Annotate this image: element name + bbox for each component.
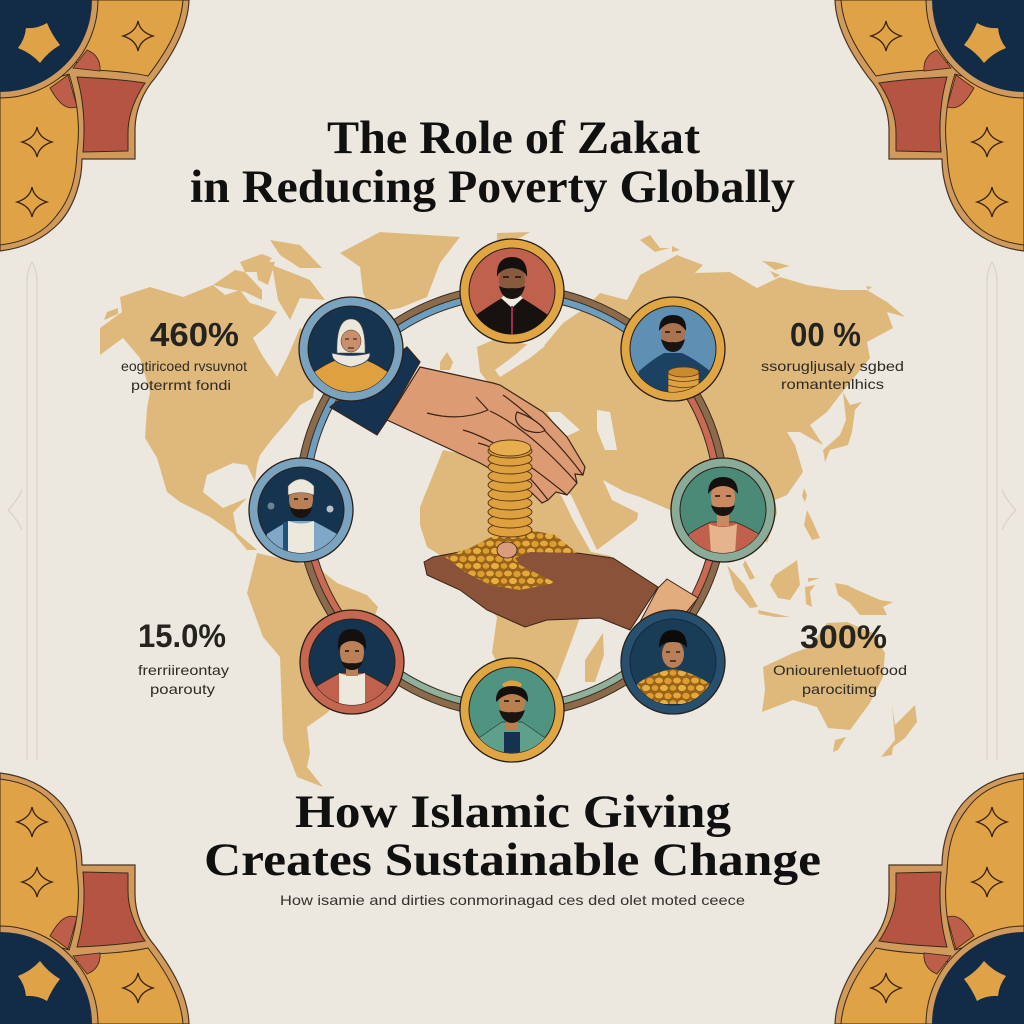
Sumatra and Java xyxy=(727,560,790,617)
stat: bottom right: 300% xyxy=(800,619,887,655)
Madagascar xyxy=(585,633,604,682)
stat: top left xyxy=(121,316,247,393)
portrait: bottom-right man with coins xyxy=(621,610,725,714)
subtitle heading: Creates Sustainable Change xyxy=(204,834,821,886)
coin stack xyxy=(488,440,532,537)
coin pile on lower hand xyxy=(424,530,698,630)
South America xyxy=(247,553,378,787)
stat: bottom right: parocitimg xyxy=(802,681,877,697)
stat: bottom right xyxy=(773,619,907,697)
stat: bottom left: 15.0% xyxy=(138,618,226,654)
stat: top right: romantenlhics xyxy=(781,376,884,392)
giving hand with cuff xyxy=(330,347,585,503)
Africa xyxy=(420,450,611,690)
Japan xyxy=(823,392,862,462)
corner ornament: bottom right xyxy=(835,773,1024,1024)
stat: top right: 00 % xyxy=(790,316,861,353)
title xyxy=(190,112,796,213)
corner ornament: top left xyxy=(0,0,189,251)
Iceland and UK xyxy=(440,232,530,370)
Australia xyxy=(762,622,885,730)
title: in Reducing Poverty Globally xyxy=(190,161,796,213)
corner ornament: top right xyxy=(835,0,1024,251)
portrait: left man with white cap xyxy=(249,458,353,562)
portrait: top-left person in white hood xyxy=(299,297,403,401)
world map xyxy=(100,232,917,787)
portrait: top man xyxy=(460,239,564,343)
Sulawesi xyxy=(805,578,820,607)
subtitle heading xyxy=(204,786,821,886)
Eurasia xyxy=(477,255,905,550)
stat: bottom left: poarouty xyxy=(150,681,215,697)
portrait: top-right man with coins xyxy=(621,297,725,401)
title: The Role of Zakat xyxy=(327,112,700,164)
lower hand with sleeve xyxy=(424,545,698,630)
thumb nail xyxy=(497,542,517,558)
corner ornament: bottom left xyxy=(0,773,189,1024)
ring xyxy=(221,210,803,792)
subtitle heading: How Islamic Giving xyxy=(295,786,732,838)
Arctic Russia islands xyxy=(640,235,872,290)
stat: bottom right: Oniourenletuofood xyxy=(773,662,907,678)
coin heap xyxy=(445,530,577,590)
Philippines and Taiwan xyxy=(802,488,820,540)
Greenland xyxy=(340,232,460,313)
Arctic islands xyxy=(104,240,325,320)
stat: top left: 460% xyxy=(150,316,239,353)
stat: top left: eogtiricoed rvsuvnot xyxy=(121,358,247,374)
North America xyxy=(100,285,320,550)
side ornament: left xyxy=(8,262,37,760)
caption: How isamie and dirties conmorinagad ces ded olet moted ceece xyxy=(280,892,745,908)
portrait: right man xyxy=(671,458,775,562)
Tasmania and New Zealand xyxy=(833,705,917,757)
side ornament: right xyxy=(987,262,1016,760)
New Guinea xyxy=(835,583,893,615)
portrait: bottom man xyxy=(460,658,564,762)
stat: top right xyxy=(761,316,904,392)
stat: top left: poterrmt fondi xyxy=(131,377,231,393)
seas cut out of Eurasia xyxy=(495,342,617,450)
stat: bottom left xyxy=(138,618,229,697)
portrait: bottom-left man xyxy=(300,610,404,714)
stat: bottom left: frerriireontay xyxy=(138,662,229,678)
stat: top right: ssorugljusaly sgbed xyxy=(761,358,904,374)
Borneo xyxy=(770,560,800,600)
